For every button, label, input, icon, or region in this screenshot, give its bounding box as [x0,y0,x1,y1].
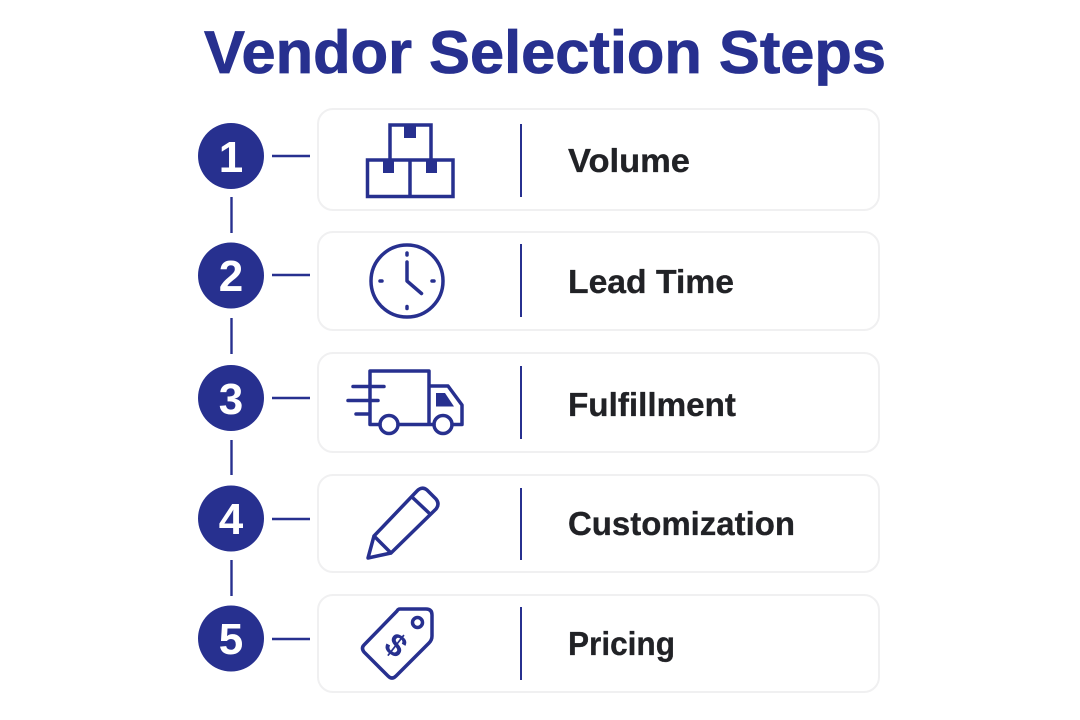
panel: pricing card [318,595,879,692]
connector to card 4 [272,518,310,520]
icon: delivery truck [348,371,462,434]
label: pricing: Pricing [568,625,675,662]
divider [520,244,522,317]
label: volume: Volume [568,142,690,179]
panel: customization card [318,475,879,572]
step number 5: 5 [219,615,243,664]
label: customization: Customization [568,505,795,542]
divider [520,488,522,560]
step number 5 [198,606,264,672]
connector to card 1 [272,155,310,157]
divider [520,607,522,680]
panel: fulfillment card [318,353,879,452]
step number 3: 3 [219,375,243,424]
step number 4 [198,486,264,552]
label: fulfillment: Fulfillment [568,386,736,423]
panel: lead time card [318,232,879,330]
icon: pencil [368,488,438,558]
divider [520,366,522,439]
step number 3 [198,365,264,431]
step 1: volume [198,109,879,210]
icon: price tag: $ [378,625,414,665]
connector to card 5 [272,638,310,640]
step 4: customization [198,475,879,572]
step 5: pricing [198,595,879,692]
icon: clock [371,245,443,317]
panel: volume card [318,109,879,210]
connector to card 3 [272,397,310,399]
title: Vendor Selection Steps [204,19,886,86]
step number 2 [198,242,264,308]
step number 4: 4 [219,495,244,544]
step number 1 [198,123,264,189]
connector lines between steps [230,197,233,596]
connector to card 2 [272,274,310,276]
icon: price tag [362,609,432,678]
step 3: fulfillment [198,353,879,452]
divider [520,124,522,197]
step number 1: 1 [219,133,243,182]
step number 2: 2 [219,252,243,301]
label: lead time: Lead Time [568,263,734,300]
icon: stacked boxes [368,125,453,196]
step 2: lead time [198,232,879,330]
